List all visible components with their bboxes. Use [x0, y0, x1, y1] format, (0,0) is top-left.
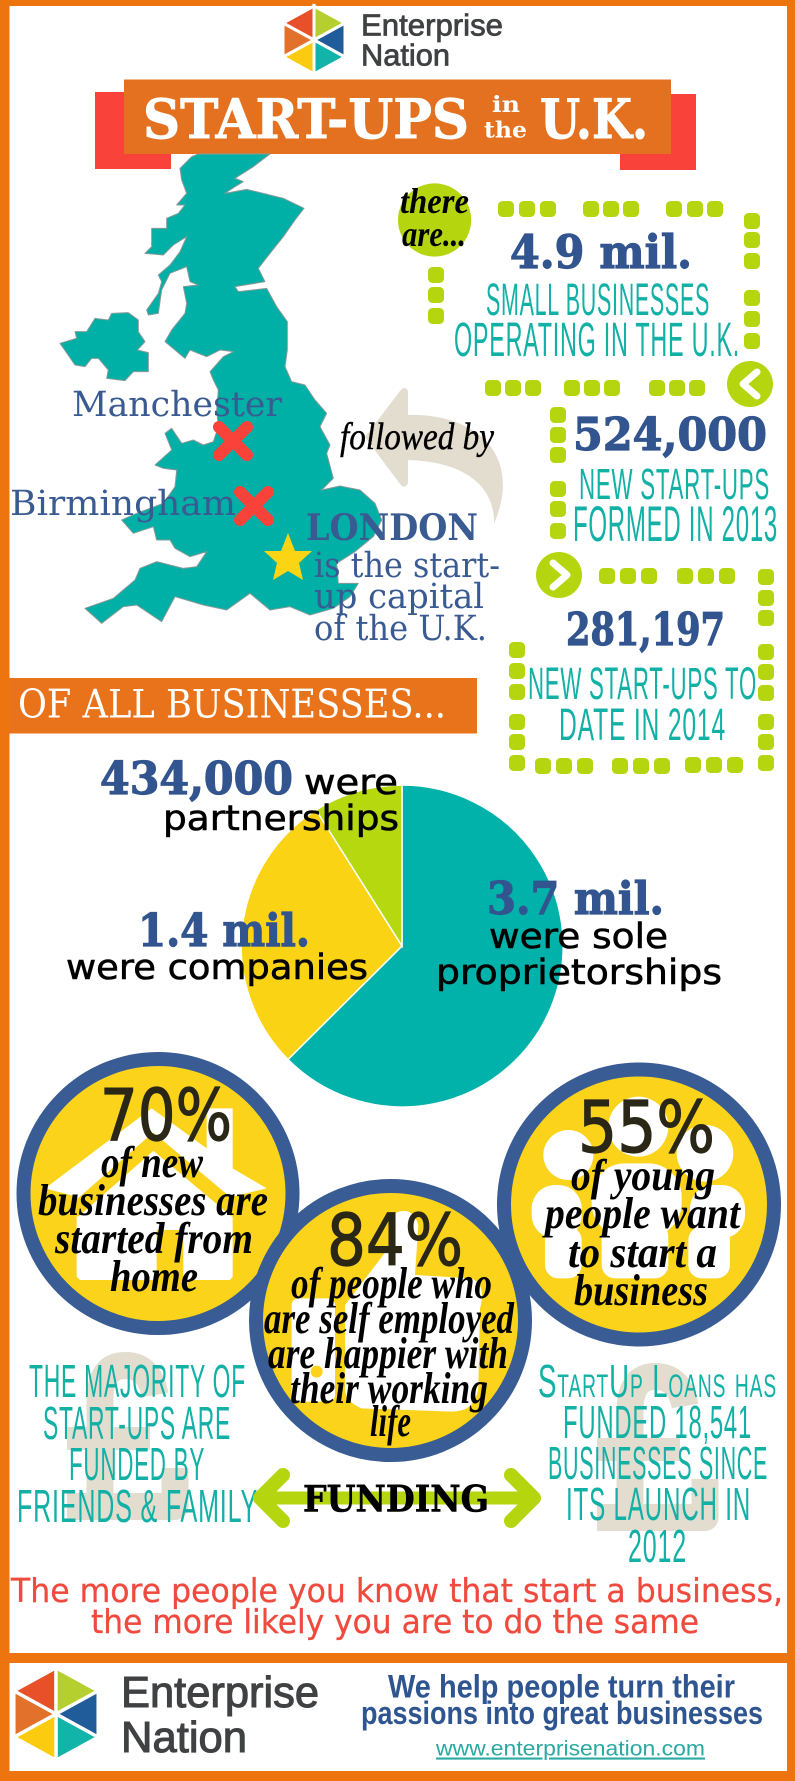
arrow: double-headed funding arrow: [260, 1475, 534, 1521]
pie label: companies: [66, 904, 368, 988]
icon: group of people: [532, 1097, 745, 1278]
logo wordmark: Nation: [121, 1713, 247, 1762]
stat: 524,000 new start-ups: [573, 408, 778, 552]
text: StartUp Loans: 2012: [628, 1520, 687, 1572]
circle caption: of new: [101, 1138, 204, 1187]
banner red tabs: [95, 92, 696, 170]
footer tagline: [361, 1668, 763, 1731]
circle caption: life: [370, 1397, 411, 1446]
circle: 84% happier self employed: [256, 1186, 525, 1455]
footer white panel: [10, 1663, 787, 1771]
icon: right chevron circle: [536, 552, 582, 598]
icon: hexagon logo: [283, 6, 345, 74]
pie label: sole proprietorships: 3.7 mil.: [487, 872, 664, 925]
55% text: 55%: [578, 1086, 715, 1169]
slice: sole proprietorships: [288, 785, 563, 1107]
circle caption: started from: [54, 1214, 253, 1263]
footer tagline: We help people turn their: [388, 1668, 735, 1704]
circle: 70% started from home: [24, 1059, 292, 1328]
stat: 281,197 new start-ups: 281,197: [566, 603, 725, 656]
pie label: partnerships: 434,000: [100, 752, 293, 805]
logo wordmark: Enterprise: [361, 8, 503, 42]
text: majority funded by friends and family: FRIENDS & FAMILY: [17, 1480, 258, 1532]
yellow disc: [504, 1070, 774, 1340]
circle caption: businesses are: [38, 1176, 268, 1225]
title text: the: [484, 118, 527, 144]
icon: Manchester cross: [219, 427, 247, 455]
London capital text: [306, 507, 500, 649]
text: majority funded by friends and family: THE MAJORITY OF: [29, 1355, 246, 1407]
circle caption: [38, 1138, 268, 1301]
red closing statement: the more likely you are to do the same: [91, 1602, 699, 1641]
pie label: sole proprietorships: proprietorships: [436, 953, 722, 993]
callout circle: there are: [398, 181, 471, 257]
map of the U.K.: [10, 154, 382, 623]
text: majority funded by friends and family: START-UPS ARE: [43, 1397, 231, 1449]
London capital text: up capital: [314, 577, 484, 617]
stat: 524,000 new start-ups: 524,000: [573, 408, 767, 461]
London capital text: is the start-: [314, 546, 500, 586]
circle caption: their working: [290, 1364, 488, 1413]
there are text: are...: [402, 214, 466, 254]
icon: Birmingham cross: [240, 492, 268, 520]
logo wordmark: [121, 1668, 319, 1762]
there are text: there: [400, 181, 469, 221]
pie label: sole proprietorships: [436, 872, 722, 993]
label: funding: FUNDING: [303, 1478, 489, 1520]
circle: 55% of young people: [504, 1070, 774, 1340]
header logo: [283, 6, 503, 74]
pie label: partnerships: partnerships: [163, 799, 399, 839]
there are text: [400, 181, 469, 254]
circle caption: [541, 1151, 742, 1315]
pie chart: [241, 785, 563, 1107]
logo wordmark: Nation: [361, 38, 450, 72]
circle caption: home: [110, 1252, 198, 1301]
section heading: of all businesses: OF ALL BUSINESSES...: [18, 682, 446, 728]
text: majority funded by friends and family: [17, 1355, 258, 1532]
70% text: 70%: [100, 1074, 232, 1157]
circle caption: are happier with: [268, 1329, 508, 1378]
circle caption: [264, 1259, 515, 1446]
title text: U.K.: [540, 87, 648, 151]
icon: tan pound sign right: [597, 1376, 705, 1526]
icon: London star: [264, 533, 312, 580]
footer logo: [14, 1668, 319, 1762]
circle caption: are self employed: [264, 1294, 515, 1343]
yellow disc: [256, 1186, 525, 1455]
logo wordmark: [361, 8, 503, 72]
stat: 281,197 new start-ups: [528, 603, 757, 750]
slice: partnerships: [316, 785, 402, 946]
icon: white thumbs up: [292, 1211, 482, 1412]
title text: START-UPS: [143, 87, 469, 151]
circle caption: of people who: [291, 1259, 492, 1308]
circle caption: to start a: [568, 1228, 717, 1277]
text: majority funded by friends and family: FUNDED BY: [69, 1438, 205, 1490]
stat: 4.9 million small businesses: 4.9 mil.: [510, 225, 692, 279]
pie label: companies: were companies: [66, 948, 368, 988]
circle caption: people want: [541, 1189, 742, 1238]
icon: left chevron circle: [727, 361, 773, 407]
slice: companies: [241, 810, 402, 1060]
green circle: [398, 183, 471, 257]
pie label: sole proprietorships: were sole: [489, 917, 668, 957]
84% text: 84%: [327, 1199, 463, 1282]
red closing statement: [10, 1571, 783, 1641]
stat: 4.9 million small businesses: [454, 225, 740, 367]
title text: [143, 87, 648, 151]
circle caption: business: [574, 1266, 708, 1315]
icon: tan pound sign left: [67, 1366, 175, 1515]
pie label: partnerships: were: [304, 763, 398, 803]
logo wordmark: Enterprise: [121, 1668, 319, 1717]
label: Birmingham: Birmingham: [10, 484, 236, 524]
London capital text: LONDON: [306, 507, 478, 549]
text: followed by: followed by: [340, 416, 494, 458]
Great Britain and Northern Ireland shape: [60, 154, 382, 623]
footer website link text: www.enterprisenation.com: [435, 1738, 705, 1760]
pie label: partnerships: [100, 752, 399, 839]
London capital text: of the U.K.: [314, 609, 487, 649]
label: Manchester: Manchester: [72, 385, 282, 425]
arrow: curved tan arrow: [365, 388, 503, 524]
yellow disc: [24, 1059, 292, 1328]
icon: hexagon logo: [14, 1668, 98, 1760]
title banner: [95, 80, 696, 170]
banner orange band: [124, 80, 671, 154]
circle caption: of young: [571, 1151, 715, 1200]
text: StartUp Loans: [538, 1355, 777, 1572]
pie label: companies: 1.4 mil.: [138, 904, 310, 957]
dotted connector frames: [428, 201, 774, 774]
title text: in: [492, 92, 520, 118]
icon: house: [45, 1108, 267, 1280]
